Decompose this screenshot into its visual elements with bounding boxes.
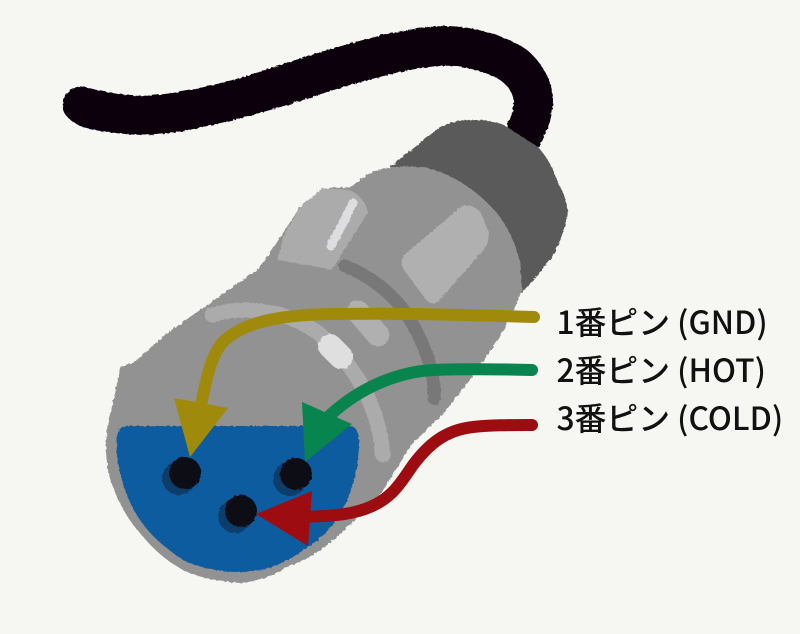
white highlight	[330, 346, 341, 357]
dark rib	[345, 266, 434, 398]
label: pin 2: 2番ピン (HOT)	[556, 346, 766, 392]
pin 2	[273, 458, 312, 496]
arrow: pin 3 COLD	[256, 425, 532, 546]
black cable	[63, 26, 553, 150]
arrow: pin 1 GND	[174, 314, 534, 457]
arrow: pin 2 HOT	[302, 369, 532, 462]
dark rear cap	[390, 120, 567, 293]
pin 1	[162, 457, 201, 495]
label: pin 3: 3番ピン (COLD)	[556, 394, 783, 440]
label: pin 1: 1番ピン (GND)	[556, 298, 768, 344]
pin 3	[218, 495, 257, 533]
front rim highlight	[212, 310, 383, 455]
illustration: XLR connector	[63, 26, 567, 583]
grey connector body	[106, 166, 522, 583]
light panel on top	[278, 188, 368, 270]
white stripe highlight	[331, 203, 353, 246]
light side panel	[401, 205, 489, 303]
small light tab	[358, 312, 378, 335]
blue connector face	[117, 426, 359, 572]
